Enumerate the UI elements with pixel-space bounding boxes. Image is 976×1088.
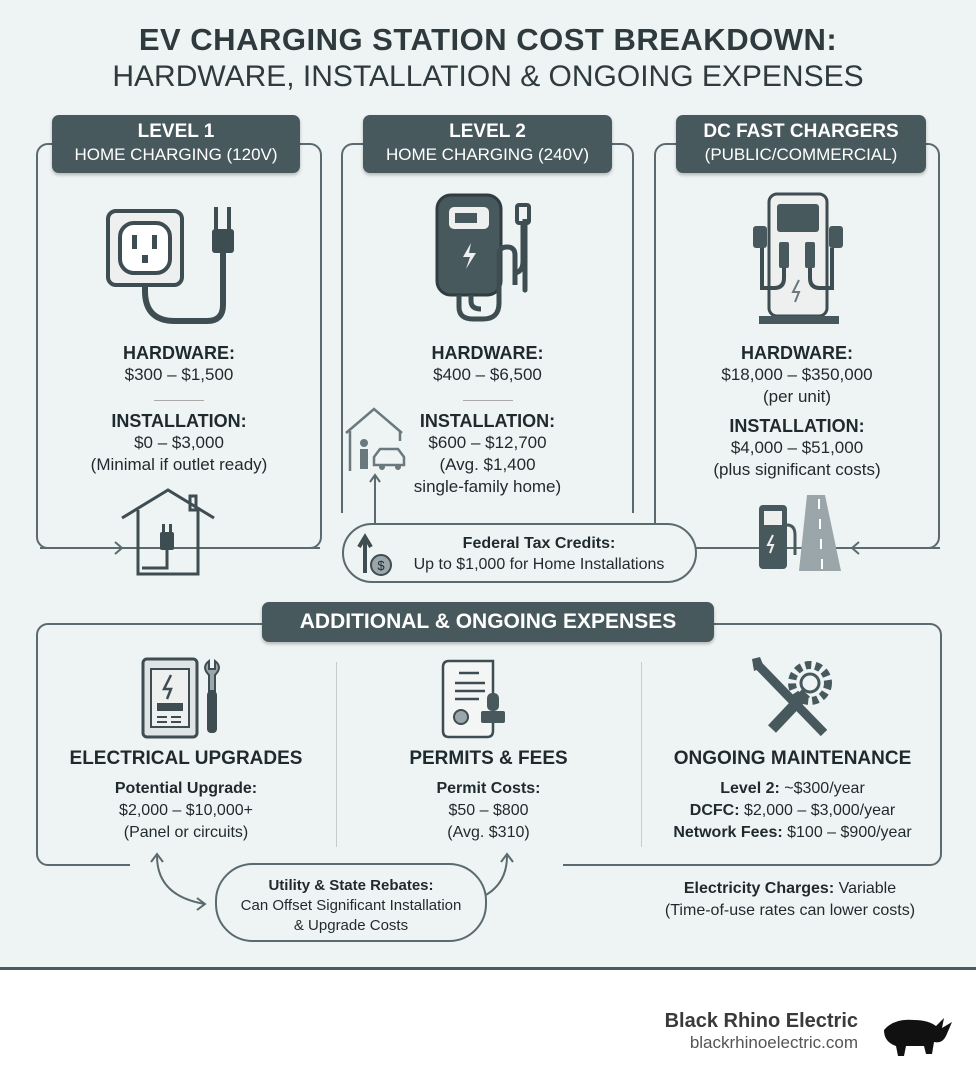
logo: Black Rhino Electric — [665, 1010, 858, 1032]
title — [112, 22, 864, 93]
tab: dc fast: DC FAST CHARGERS — [703, 121, 899, 142]
panel: level 1 — [36, 115, 322, 549]
callout: federal tax credits: Up to $1,000 for Home Installations — [414, 556, 664, 573]
text: electricity charges: (Time-of-use rates can lower costs) — [665, 902, 915, 919]
title: HARDWARE, INSTALLATION & ONGOING EXPENSES — [112, 60, 864, 93]
hardware dc: (per unit) — [763, 387, 831, 406]
title: EV CHARGING STATION COST BREAKDOWN: — [139, 22, 837, 57]
icon: dc charger — [753, 192, 843, 324]
erase box bottom where rebates pill goes — [130, 860, 563, 868]
text: ongoing maintenance: ONGOING MAINTENANCE — [674, 748, 911, 769]
panel: dc fast — [654, 115, 940, 549]
text: electrical upgrades — [70, 748, 302, 841]
hardware dc: INSTALLATION: — [729, 416, 865, 436]
tab: level 1: HOME CHARGING (120V) — [74, 145, 278, 164]
icon: rhino — [884, 1018, 952, 1056]
hardware level 1: $0 – $3,000 — [134, 433, 224, 452]
hardware level 1: (Minimal if outlet ready) — [91, 455, 267, 474]
tab: dc fast: (PUBLIC/COMMERCIAL) — [705, 145, 897, 164]
tab: level 2 — [363, 115, 612, 173]
text: ongoing maintenance: DCFC: $2,000 – $3,000/year — [690, 802, 895, 819]
arrow: tax credit up — [369, 473, 381, 523]
hardware level 2: HARDWARE: — [432, 343, 544, 363]
text: electrical upgrades: Potential Upgrade: — [115, 780, 257, 797]
hardware dc — [713, 343, 881, 479]
text: permits: $50 – $800 — [448, 802, 529, 819]
callout: utility rebates: Utility & State Rebates: — [268, 877, 434, 894]
icon: charger and road — [759, 495, 841, 571]
hardware level 1 — [91, 343, 267, 474]
hardware level 2 — [414, 343, 561, 496]
text: ongoing maintenance: Network Fees: $100 – $900/year — [673, 824, 912, 841]
text: electrical upgrades: (Panel or circuits) — [124, 824, 248, 841]
hardware level 1: $300 – $1,500 — [125, 365, 233, 384]
hardware level 2: $600 – $12,700 — [428, 433, 547, 452]
icon: house with person and car — [345, 408, 406, 471]
text: ongoing maintenance — [673, 748, 912, 841]
hardware level 2: $400 – $6,500 — [433, 365, 542, 384]
icon: dollar arrow — [357, 533, 392, 576]
hardware dc: $18,000 – $350,000 — [721, 365, 873, 384]
arrows: rebates — [150, 852, 514, 911]
icon: wrench and gear — [752, 657, 832, 736]
text: permits — [409, 748, 568, 841]
tab: level 1 — [52, 115, 300, 173]
hardware level 2: single-family home) — [414, 477, 561, 496]
callout: utility rebates: Can Offset Significant Installation — [241, 897, 461, 914]
icon: dollar arrow: $ — [377, 558, 385, 573]
text: electricity charges: Electricity Charges: Variable — [684, 880, 896, 897]
text: permits: PERMITS & FEES — [409, 748, 568, 769]
hardware dc: (plus significant costs) — [713, 460, 881, 479]
callout: utility rebates — [215, 863, 487, 942]
hardware level 1: INSTALLATION: — [111, 411, 247, 431]
tab: level 2: HOME CHARGING (240V) — [386, 145, 589, 164]
tab: additional: ADDITIONAL & ONGOING EXPENSES — [300, 610, 676, 633]
hardware level 1: HARDWARE: — [123, 343, 235, 363]
text: ongoing maintenance: Level 2: ~$300/year — [720, 780, 865, 797]
tab: dc fast — [676, 115, 926, 173]
logo: blackrhinoelectric.com — [690, 1033, 858, 1052]
hardware dc: HARDWARE: — [741, 343, 853, 363]
text: electrical upgrades: ELECTRICAL UPGRADES — [70, 748, 302, 769]
hardware level 2: (Avg. $1,400 — [439, 455, 536, 474]
arrows into panel bottoms — [40, 541, 940, 555]
text: permits: (Avg. $310) — [447, 824, 530, 841]
callout: utility rebates: & Upgrade Costs — [294, 917, 408, 934]
tab: additional — [262, 602, 714, 642]
hardware dc: $4,000 – $51,000 — [731, 438, 863, 457]
text: permits: Permit Costs: — [436, 780, 541, 797]
icon: electrical panel — [142, 658, 220, 738]
tab: level 1: LEVEL 1 — [138, 121, 214, 142]
text: electricity charges — [665, 880, 915, 919]
text: electrical upgrades: $2,000 – $10,000+ — [119, 802, 253, 819]
icon: house with plug — [121, 488, 215, 576]
logo — [665, 1010, 952, 1056]
tab: level 2: LEVEL 2 — [449, 121, 526, 142]
panel: level 2 — [341, 115, 634, 513]
callout: federal tax credits — [342, 523, 697, 583]
panel: additional & ongoing expenses — [36, 602, 942, 866]
icon: outlet and plug — [106, 207, 234, 324]
callout: federal tax credits: Federal Tax Credits: — [463, 535, 615, 552]
hardware level 2: INSTALLATION: — [420, 411, 555, 431]
icon: wall charger — [436, 194, 531, 322]
icon: permit scroll — [442, 660, 505, 738]
